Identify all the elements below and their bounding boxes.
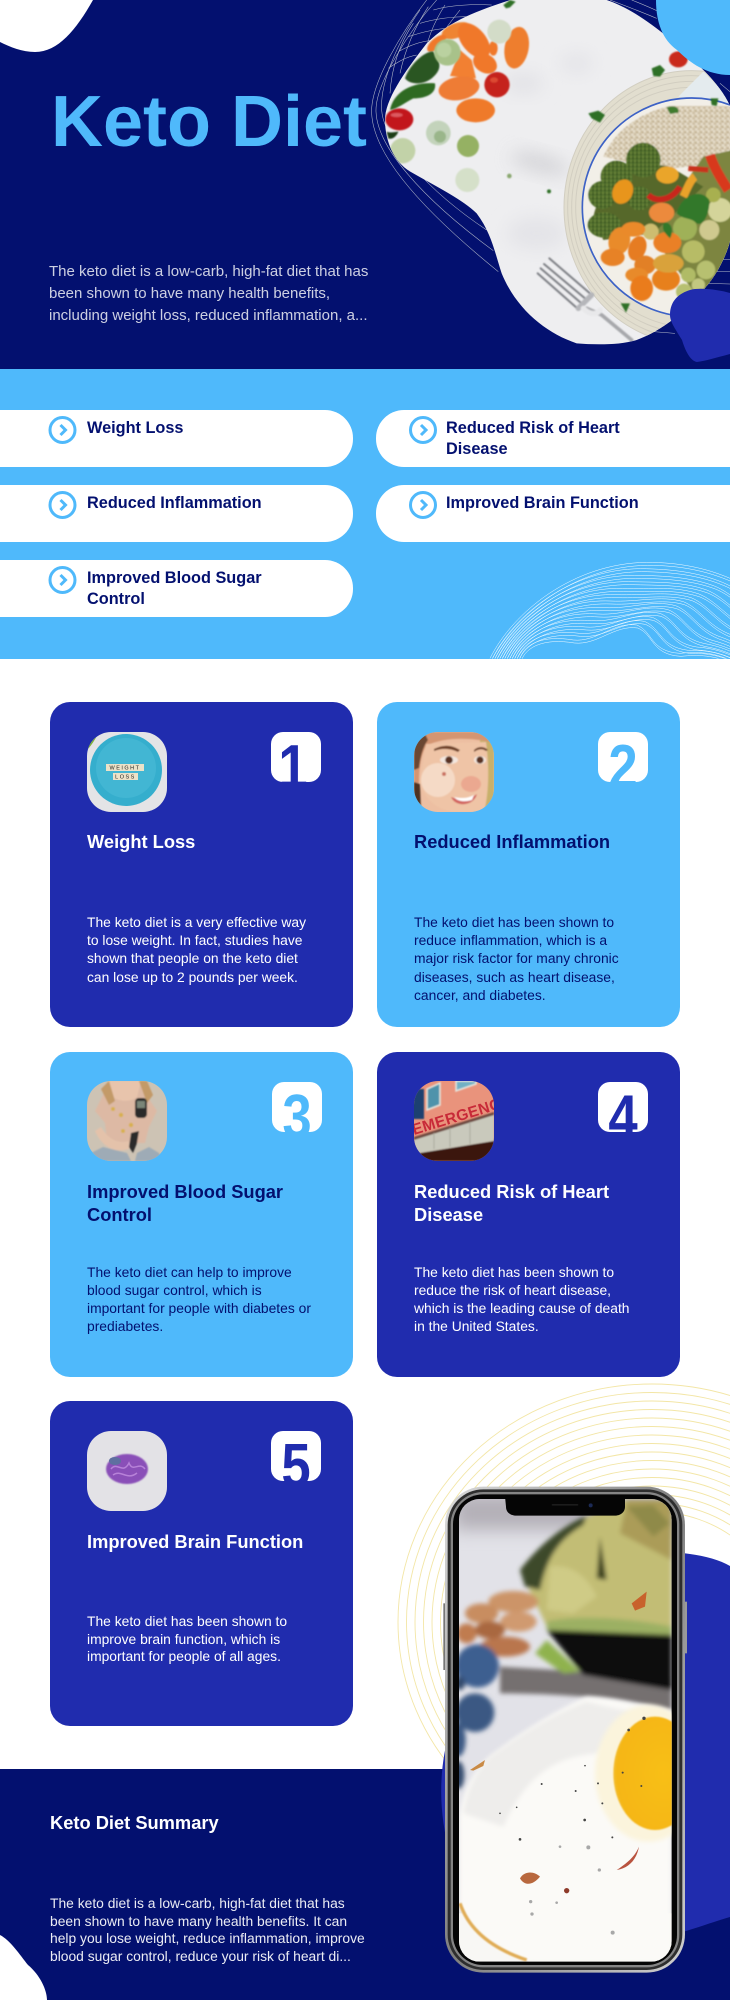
- icon: weight loss plate photo: LOSS: [115, 774, 136, 780]
- body text: [87, 1264, 311, 1334]
- benefit pill: Improved Blood Sugar Control: Improved Blood Sugar: [87, 569, 262, 587]
- card 1: Weight Loss: [50, 702, 353, 1027]
- body text: can lose up to 2 pounds per week.: [87, 969, 298, 985]
- vegetables: sprouts: [673, 216, 697, 240]
- brussels sprouts: [390, 20, 511, 192]
- benefit pill: Improved Blood Sugar Control: Control: [87, 590, 145, 608]
- light blue blob top right: [656, 0, 730, 75]
- icon: weight loss plate photo: [87, 732, 167, 812]
- body text: [413, 1264, 630, 1334]
- summary text: help you lose weight, reduce inflammation, improve: [50, 1930, 365, 1946]
- title: Keto Diet: [51, 82, 367, 162]
- body text: [87, 1613, 287, 1664]
- card heading: Reduced Risk of Heart: [414, 1181, 609, 1202]
- card heading: [414, 1181, 609, 1225]
- icon: emergency building photo: EMERGENCY: [410, 1092, 514, 1139]
- card 2: Reduced Inflammation: Reduced Inflammation: [414, 831, 610, 852]
- card heading: [87, 1181, 283, 1225]
- marble surface: [370, 0, 730, 367]
- number badge 5: [271, 1431, 321, 1481]
- intro text: [49, 263, 368, 324]
- body text: reduce the risk of heart disease,: [414, 1282, 611, 1298]
- body text: prediabetes.: [87, 1318, 163, 1334]
- card 1: Weight Loss: Weight Loss: [87, 831, 195, 852]
- benefit pill: Reduced Risk of Heart Disease: Reduced Risk of Heart: [446, 419, 620, 437]
- summary text: The keto diet is a low-carb, high-fat diet that has: [50, 1895, 345, 1911]
- icon: emergency building photo: [414, 1081, 494, 1161]
- fork: [538, 258, 632, 340]
- panel: benefits band: [0, 369, 730, 659]
- benefit pill: Improved Blood Sugar Control: [0, 560, 353, 617]
- number badge 3: 3: [282, 1083, 312, 1152]
- card 5: Improved Brain Function: Improved Brain Function: [87, 1531, 303, 1552]
- body text: cancer, and diabetes.: [414, 987, 546, 1003]
- decorative white blob bottom left: [0, 1935, 47, 2000]
- body text: blood sugar control, which is: [87, 1282, 262, 1298]
- woven mat: [564, 71, 730, 344]
- body text: The keto diet has been shown to: [87, 1613, 287, 1629]
- parsley: [503, 0, 718, 313]
- body text: major risk factor for many chronic: [414, 950, 619, 966]
- herbs: [677, 194, 709, 224]
- vegetables: peppers: [648, 187, 680, 200]
- medium blue blob lower right: [670, 289, 730, 362]
- card 3: Improved Blood Sugar Control: [50, 1052, 353, 1377]
- body text: The keto diet is a very effective way: [87, 914, 306, 930]
- intro text: including weight loss, reduced inflammation, a...: [49, 307, 368, 324]
- icon: glucose meter photo: [87, 1081, 167, 1161]
- wave line art: [490, 562, 730, 659]
- body text: diseases, such as heart disease,: [414, 969, 615, 985]
- benefit pill: Improved Brain Function: Improved Brain Function: [446, 494, 639, 512]
- body text: The keto diet has been shown to: [414, 914, 614, 930]
- body text: in the United States.: [414, 1318, 539, 1334]
- body text: improve brain function, which is: [87, 1631, 280, 1647]
- panel: summary background: [0, 1769, 730, 2000]
- body text: The keto diet has been shown to: [414, 1264, 614, 1280]
- card heading: Disease: [414, 1204, 483, 1225]
- carrots: [424, 17, 532, 122]
- number badge 2: [598, 732, 648, 782]
- body text: to lose weight. In fact, studies have: [87, 932, 303, 948]
- body text: which is the leading cause of death: [413, 1300, 630, 1316]
- number badge 2: 2: [608, 733, 638, 802]
- egg white: [459, 1697, 672, 1962]
- benefit pill: Weight Loss: Weight Loss: [87, 419, 184, 437]
- benefit pill: Reduced Risk of Heart Disease: [376, 410, 730, 467]
- pepper flecks: [470, 1592, 647, 1935]
- benefit pill: Reduced Risk of Heart Disease: Disease: [446, 440, 508, 458]
- body text: reduce inflammation, which is a: [414, 932, 607, 948]
- card 4: Reduced Risk of Heart Disease: [377, 1052, 680, 1377]
- decorative white blob top left: [0, 0, 93, 52]
- summary text: blood sugar control, reduce your risk of heart di...: [50, 1948, 351, 1964]
- benefit pill: Reduced Inflammation: [0, 485, 353, 542]
- intro text: The keto diet is a low-carb, high-fat diet that has: [49, 263, 368, 280]
- phone screen photo: egg and avocado: [459, 1499, 672, 1962]
- cloth: [678, 72, 730, 108]
- greens: [387, 52, 439, 139]
- benefit pill: Reduced Inflammation: Reduced Inflammation: [87, 494, 262, 512]
- number badge 1: [271, 732, 321, 782]
- food behind egg: [451, 1500, 672, 1789]
- summary heading: Keto Diet Summary: [50, 1812, 219, 1833]
- benefit pill: Improved Brain Function: [376, 485, 730, 542]
- body text: shown that people on the keto diet: [87, 950, 298, 966]
- summary text: been shown to have many health benefits. It can: [50, 1913, 347, 1929]
- phone notch: [505, 1497, 625, 1516]
- broccoli: [626, 143, 661, 177]
- icon: face photo: [414, 732, 494, 812]
- body text: [87, 914, 306, 985]
- food photo blob: [370, 0, 730, 367]
- icon: weight loss plate photo: WEIGHT: [110, 766, 140, 772]
- concentric yellow rings: [398, 1384, 730, 1860]
- body text: The keto diet can help to improve: [87, 1264, 292, 1280]
- card 5: Improved Brain Function: [50, 1401, 353, 1726]
- benefit pill: Weight Loss: [0, 410, 353, 467]
- line art around food blob: [372, 0, 730, 333]
- card 2: Reduced Inflammation: [377, 702, 680, 1027]
- summary text: [50, 1895, 365, 1964]
- number badge 3: [272, 1082, 322, 1132]
- phone mockup: [443, 1487, 702, 1973]
- grains: [603, 106, 730, 170]
- intro text: been shown to have many health benefits,: [49, 285, 330, 302]
- card heading: Control: [87, 1204, 152, 1225]
- body text: important for people of all ages.: [87, 1648, 281, 1664]
- number badge 4: 4: [608, 1083, 638, 1152]
- number badge 4: [598, 1082, 648, 1132]
- bowl: [582, 98, 730, 317]
- panel: header background: [0, 0, 730, 369]
- body text: [414, 914, 619, 1003]
- number badge 5: 5: [281, 1432, 311, 1501]
- vegetables: carrots: [607, 226, 632, 254]
- icon: brain photo: [87, 1431, 167, 1511]
- blue blob behind phone: [441, 1552, 730, 1950]
- tomatoes: [385, 51, 688, 130]
- card heading: Improved Blood Sugar: [87, 1181, 283, 1202]
- body text: important for people with diabetes or: [87, 1300, 311, 1316]
- number badge 1: 1: [278, 733, 308, 802]
